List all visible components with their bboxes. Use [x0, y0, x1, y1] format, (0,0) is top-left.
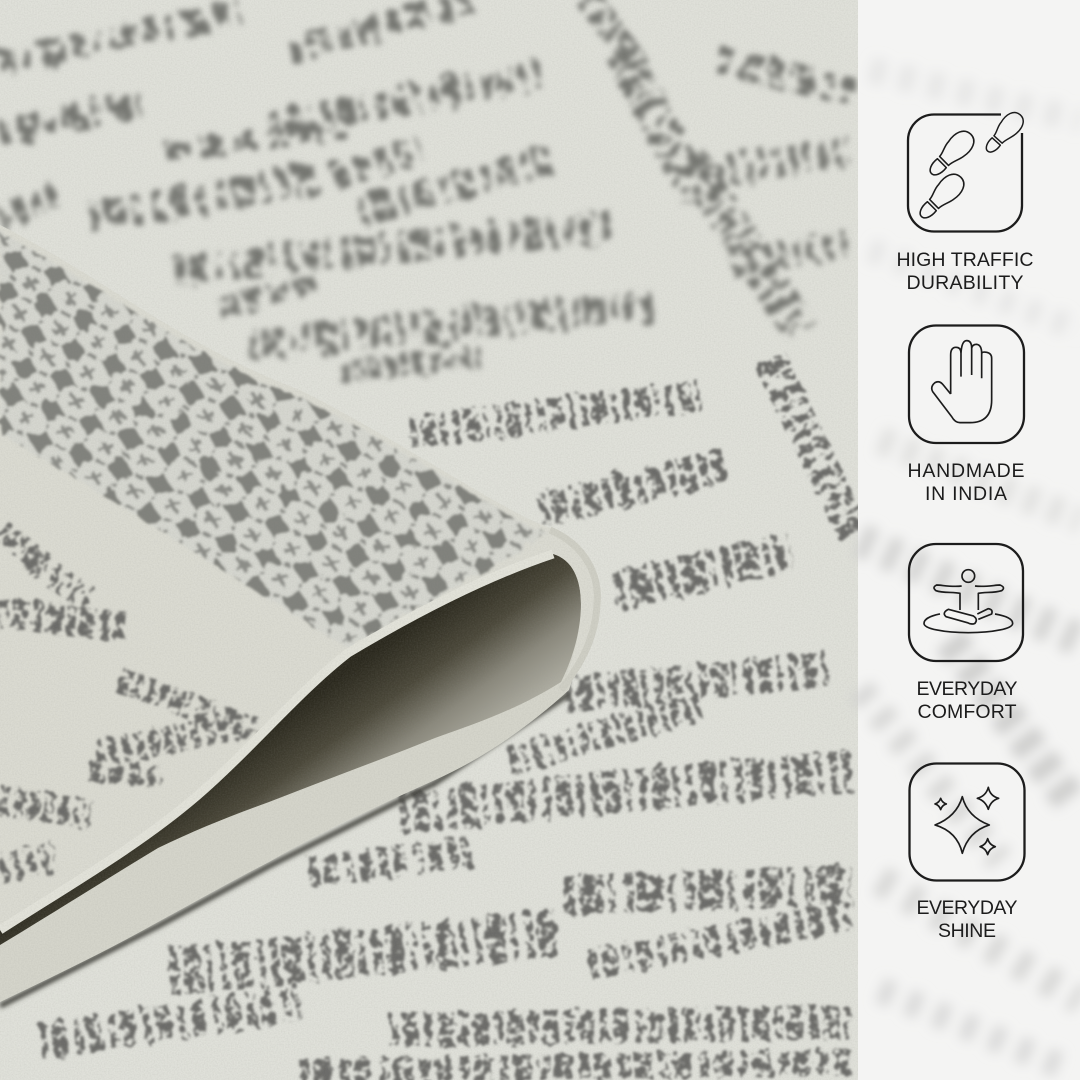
fold lower lip: [0, 600, 597, 1002]
flap woven patches: [0, 530, 255, 870]
label: high traffic durability: HIGH TRAFFIC: [896, 249, 1034, 271]
icon: footprints: [908, 108, 1027, 232]
label: handmade in india: IN INDIA: [925, 483, 1007, 505]
rug pattern rows, blurred far area: [0, 0, 855, 372]
icon: hand: [909, 326, 1024, 443]
feature: everyday comfort: [909, 544, 1023, 723]
flap hem edge: [0, 554, 553, 930]
label: everyday comfort: COMFORT: [918, 701, 1017, 723]
icon: sparkles: [910, 764, 1024, 880]
folded rug corner: [0, 225, 597, 1006]
rug pattern rows, sharper near area: [40, 360, 855, 1072]
panel: features sidebar: [858, 0, 1080, 1080]
flap diamond patterned band: [0, 232, 548, 650]
label: handmade in india: HANDMADE: [908, 460, 1024, 482]
fold cast shadow: [0, 694, 569, 1006]
label: high traffic durability: DURABILITY: [906, 272, 1024, 294]
label: everyday comfort: EVERYDAY: [916, 678, 1018, 700]
label: everyday shine: SHINE: [938, 920, 996, 942]
faint rug pattern in sidebar: [860, 70, 1080, 1070]
feature: high traffic durability: [896, 108, 1034, 294]
fold dark interior: [0, 554, 581, 945]
flap top surface: [0, 225, 597, 930]
fabric grain texture: [0, 0, 858, 1080]
feature: everyday shine: [910, 764, 1024, 942]
feature: handmade in india: [908, 326, 1024, 505]
icon: meditating figure: [909, 544, 1023, 661]
flap fold rim: [550, 530, 597, 690]
label: everyday shine: EVERYDAY: [916, 897, 1018, 919]
